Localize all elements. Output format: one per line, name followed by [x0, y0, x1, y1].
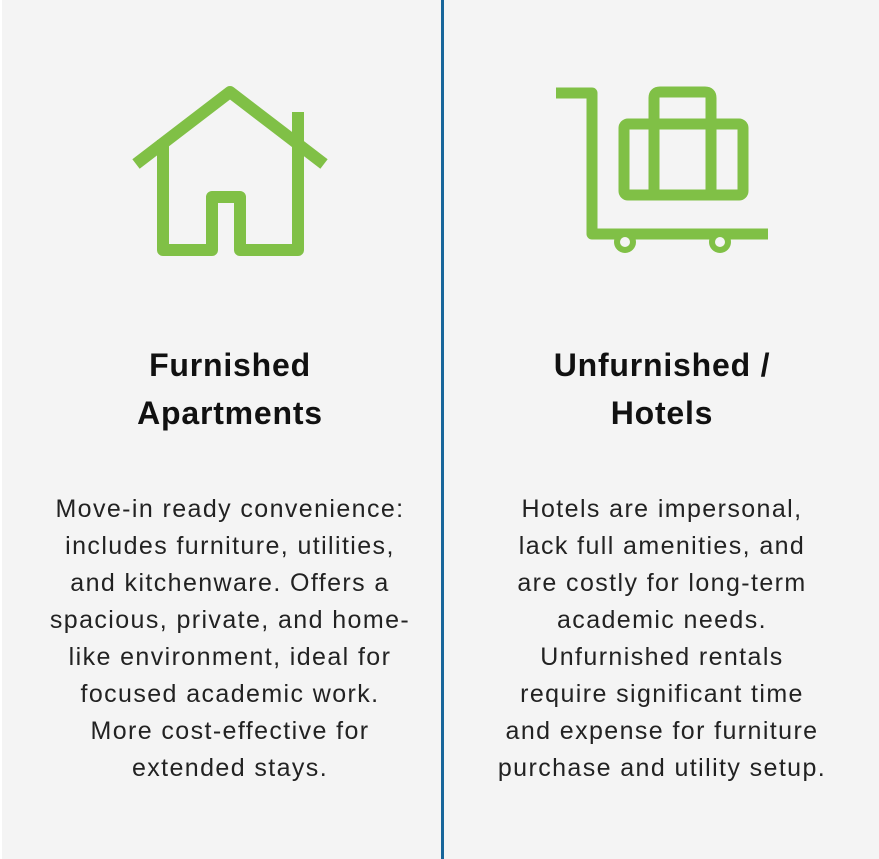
text: unfurnished: lack full amenities, and — [519, 532, 805, 560]
text: furnished: like environment, ideal for — [69, 643, 391, 671]
text: unfurnished: require significant time — [520, 680, 804, 708]
title: furnished: Apartments — [137, 395, 323, 431]
text: unfurnished — [498, 495, 826, 782]
text: furnished — [50, 495, 410, 782]
title: unfurnished: Hotels — [611, 395, 713, 431]
icons — [132, 86, 768, 256]
text: unfurnished: academic needs. — [557, 606, 767, 634]
text: furnished: Move-in ready convenience: — [55, 495, 405, 523]
title: unfurnished — [554, 347, 770, 431]
title: furnished: Furnished — [149, 347, 311, 383]
text: unfurnished: are costly for long-term — [517, 569, 807, 597]
icon: house — [136, 92, 324, 250]
text: unfurnished: Unfurnished rentals — [540, 643, 784, 671]
text: furnished: More cost-effective for — [90, 717, 370, 745]
divider — [441, 0, 444, 859]
text: furnished: extended stays. — [132, 754, 328, 782]
text: furnished: focused academic work. — [80, 680, 379, 708]
text: unfurnished: purchase and utility setup. — [498, 754, 826, 782]
icon: luggage cart — [556, 92, 768, 250]
text: furnished: and kitchenware. Offers a — [70, 569, 390, 597]
text: unfurnished: Hotels are impersonal, — [522, 495, 802, 523]
title: unfurnished: Unfurnished / — [554, 347, 770, 383]
text: furnished: includes furniture, utilities, — [65, 532, 395, 560]
title: furnished — [137, 347, 323, 431]
text: furnished: spacious, private, and home- — [50, 606, 410, 634]
text: unfurnished: and expense for furniture — [506, 717, 818, 745]
